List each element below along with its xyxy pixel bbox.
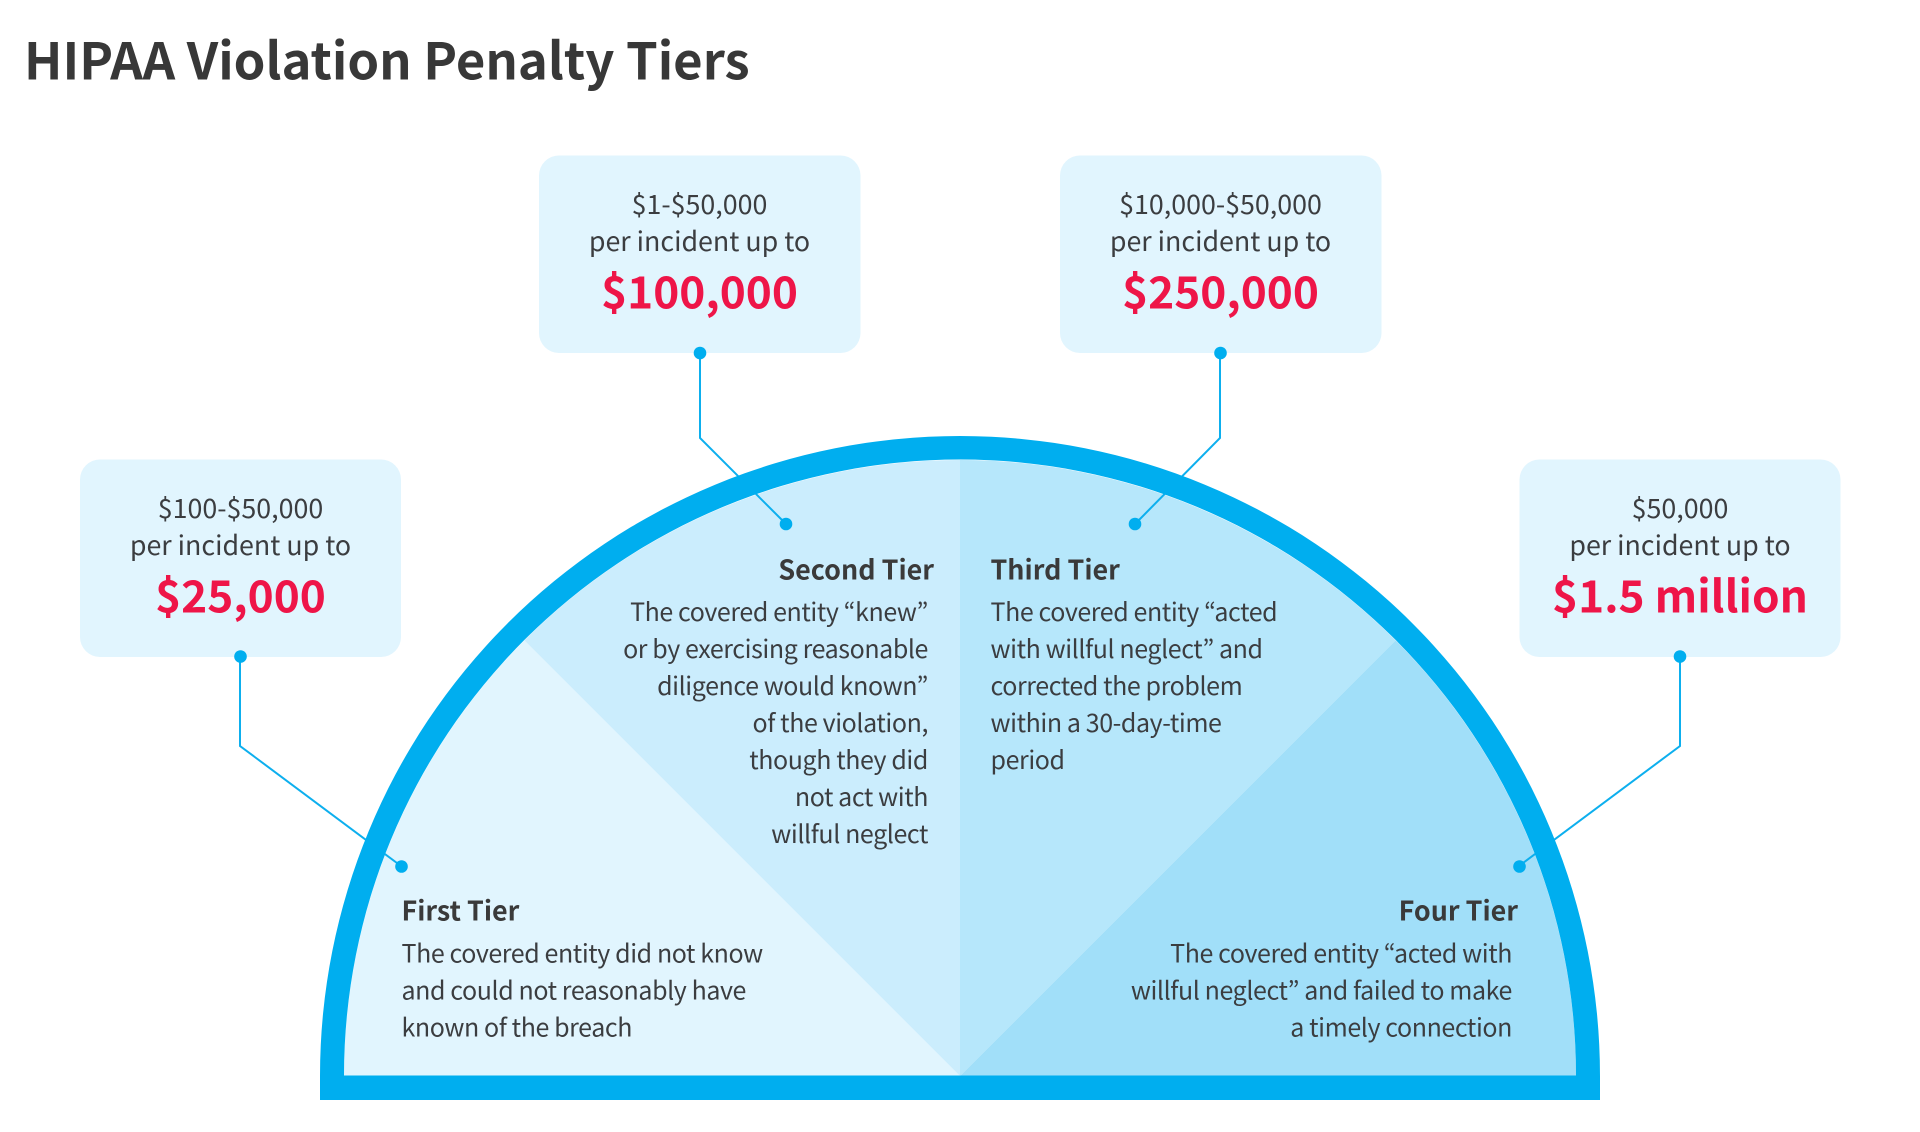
semicircle gauge fill — [344, 460, 1576, 1076]
callout: third tier penalty: per incident up to — [1110, 220, 1331, 259]
callout: second tier penalty: per incident up to — [589, 220, 810, 259]
connector dots — [234, 347, 1686, 873]
text: first tier: known of the breach — [402, 1009, 632, 1045]
text: third tier: The covered entity “acted — [990, 593, 1277, 629]
callout: fourth tier penalty: $50,000 — [1632, 487, 1728, 526]
wedge: second tier — [524, 460, 960, 1076]
text: second tier: willful neglect — [771, 815, 929, 851]
callout: second tier penalty: $100,000 — [601, 258, 798, 322]
text: second tier: or by exercising reasonable — [623, 630, 928, 666]
callout: second tier penalty: $1-$50,000 — [632, 183, 767, 222]
text: second tier: The covered entity “knew” — [630, 593, 928, 629]
text: fourth tier — [1131, 890, 1518, 1045]
callout: fourth tier penalty — [1520, 460, 1840, 657]
wedge: first tier — [344, 640, 960, 1076]
callout: first tier penalty — [80, 460, 401, 657]
text: second tier: not act with — [795, 778, 928, 814]
text: first tier: First Tier — [402, 890, 520, 929]
text: third tier: period — [990, 741, 1065, 777]
text: first tier — [402, 890, 763, 1045]
callout: second tier penalty — [539, 156, 860, 353]
text: fourth tier: Four Tier — [1399, 890, 1518, 929]
text: third tier — [990, 549, 1277, 777]
callout: third tier penalty — [1060, 156, 1382, 353]
text: fourth tier: a timely connection — [1290, 1009, 1512, 1045]
text: first tier: and could not reasonably have — [402, 972, 746, 1008]
wedge: third tier — [960, 460, 1396, 1076]
text: second tier: diligence would known” — [657, 667, 928, 703]
text: third tier: corrected the problem — [990, 667, 1242, 703]
callout: first tier penalty: $25,000 — [155, 562, 326, 626]
callout: third tier penalty: $250,000 — [1122, 258, 1319, 322]
gauge outline — [320, 436, 1600, 1100]
text: third tier: with willful neglect” and — [990, 630, 1263, 666]
text: second tier — [623, 549, 934, 851]
connector lines — [240, 353, 1680, 866]
callout: first tier penalty: per incident up to — [130, 524, 351, 563]
wedge: fourth tier — [960, 640, 1576, 1076]
text: first tier: The covered entity did not know — [402, 935, 763, 971]
text: fourth tier: willful neglect” and failed to make — [1131, 972, 1512, 1008]
text: second tier: though they did — [749, 741, 928, 777]
callout: third tier penalty: $10,000-$50,000 — [1119, 183, 1322, 222]
text: second tier: of the violation, — [753, 704, 928, 740]
text: third tier: within a 30-day-time — [990, 704, 1222, 740]
callout: fourth tier penalty: $1.5 million — [1552, 562, 1808, 626]
text: third tier: Third Tier — [990, 549, 1120, 588]
callout: first tier penalty: $100-$50,000 — [158, 487, 323, 526]
title: HIPAA Violation Penalty Tiers — [24, 20, 750, 94]
callout: fourth tier penalty: per incident up to — [1569, 524, 1791, 563]
text: second tier: Second Tier — [778, 549, 934, 588]
text: fourth tier: The covered entity “acted with — [1170, 935, 1512, 971]
